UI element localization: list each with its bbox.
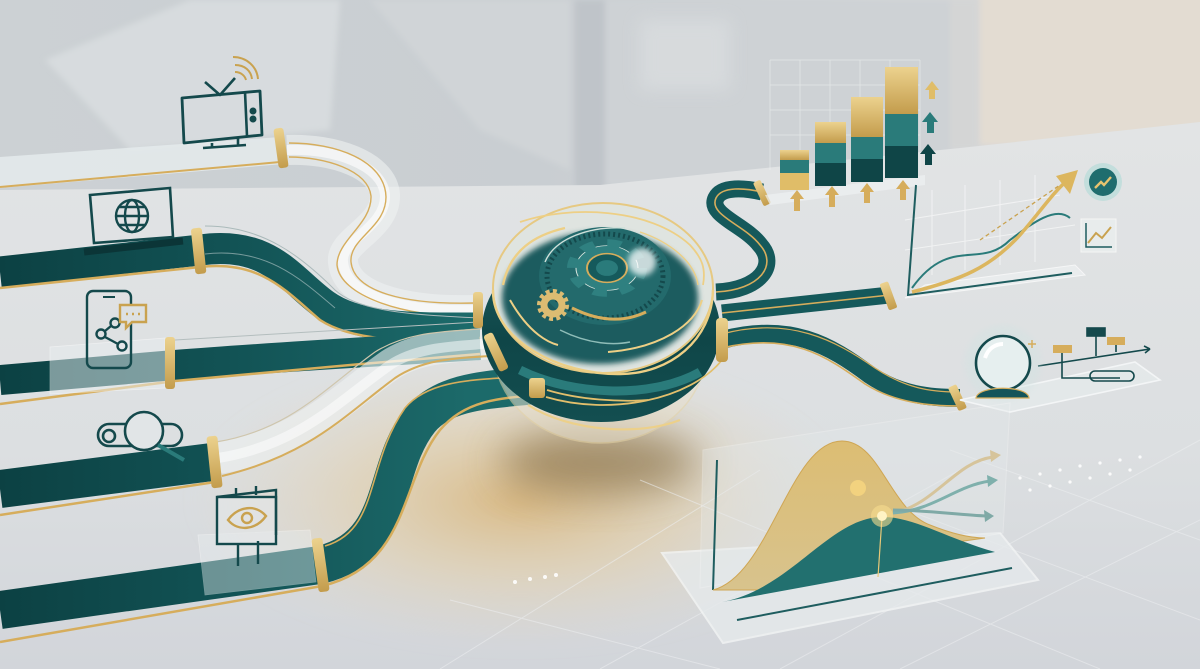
connector: laptop pipe: [191, 227, 206, 274]
connector: search pipe: [206, 436, 223, 488]
large gear: [572, 243, 642, 293]
glass dome: [493, 203, 713, 373]
forecast arrows: [893, 450, 1001, 522]
icon: trend badge: [1084, 163, 1122, 201]
pipes: outputs right: [715, 180, 967, 411]
connector: billboard pipe: [311, 537, 330, 592]
pipe: phone (teal): [0, 322, 480, 404]
dome gold rings: [493, 212, 713, 374]
bell curve panel: [662, 403, 1038, 643]
gold curve: [713, 441, 985, 590]
icon: mini chart: [1081, 219, 1116, 252]
icon: billboard eye: [217, 486, 276, 566]
glass back: [700, 403, 1010, 588]
glass base: [662, 533, 1038, 643]
pipe: laptop (teal): [0, 226, 480, 340]
glass highlight: [628, 248, 656, 276]
timeline: [960, 328, 1160, 412]
line chart: [905, 170, 1085, 298]
sphere body: [482, 238, 720, 422]
central sphere: [473, 203, 728, 443]
connectors: sphere clips: [473, 292, 483, 328]
pipe: search (clear upper, teal left): [0, 328, 490, 515]
connector: phone pipe: [165, 337, 175, 389]
icon: laptop with globe: [84, 188, 183, 252]
connector: television pipe: [273, 127, 289, 169]
small gold gear: [539, 291, 567, 319]
dome interior: [502, 232, 698, 364]
lower clear shell: [494, 257, 706, 443]
pipe: billboard (teal): [0, 376, 540, 642]
stacked bar chart: [765, 60, 939, 211]
body circuitry: [520, 360, 722, 429]
icon: phone share: [87, 291, 146, 368]
chart grid: [770, 60, 920, 170]
arrows under and beside bars: [790, 190, 804, 211]
icon: crystal ball: [965, 325, 1041, 401]
pipe: television (clear): [0, 127, 475, 317]
gear disc: [539, 227, 671, 325]
teal curve: [722, 517, 995, 602]
icon: search: [98, 412, 184, 460]
connectors: output pipes: [753, 180, 771, 206]
icon: television: [182, 57, 262, 148]
